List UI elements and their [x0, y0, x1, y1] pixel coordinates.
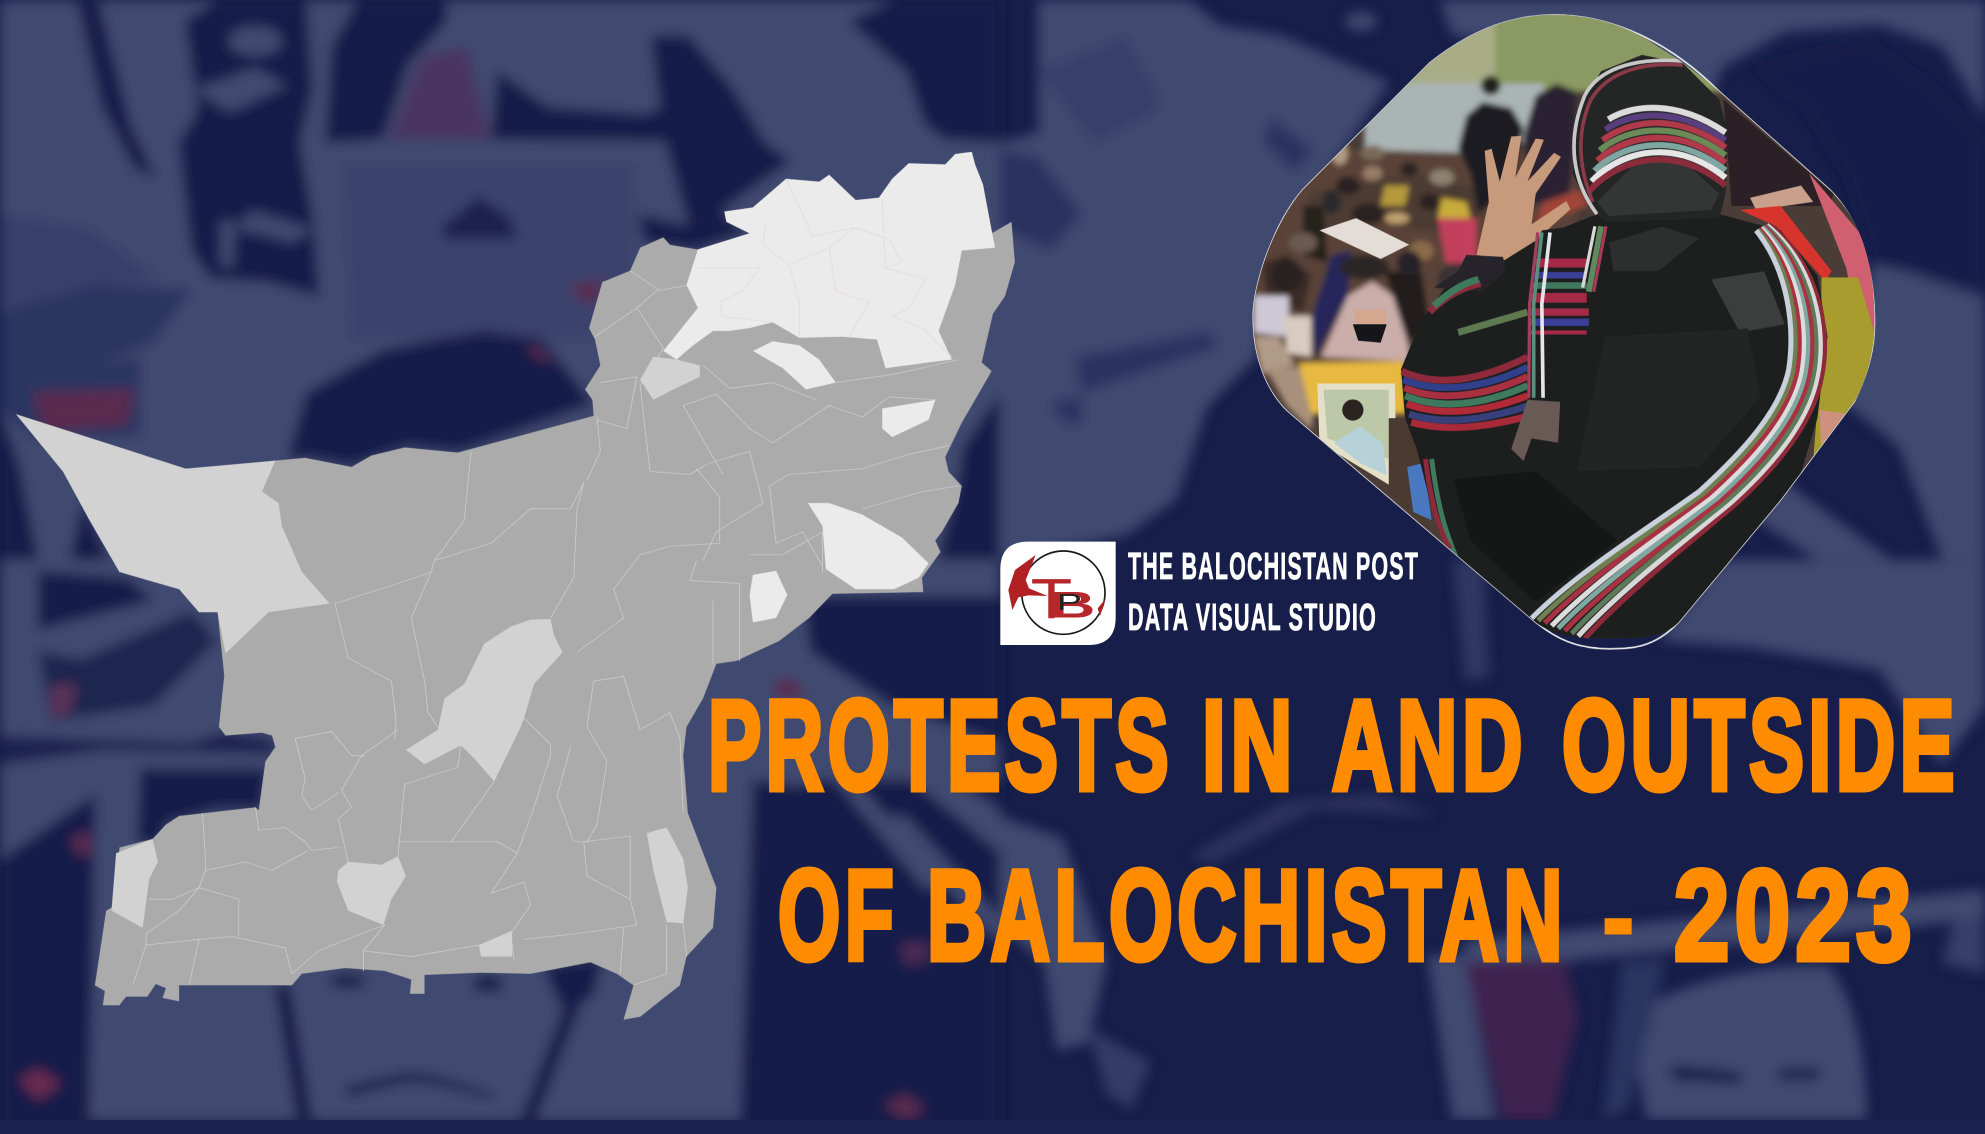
right background figures	[1723, 100, 1834, 206]
lower left strip	[1426, 459, 1456, 557]
main title: PROTESTS	[708, 674, 1173, 818]
map base	[16, 152, 1015, 1020]
main title: -	[1601, 844, 1641, 988]
studio name text: THE BALOCHISTAN POST	[1128, 546, 1419, 588]
main title: IN	[1202, 674, 1297, 818]
district boundaries	[133, 271, 958, 985]
studio name text: DATA VISUAL STUDIO	[1128, 597, 1377, 639]
main title	[708, 674, 1959, 988]
sash fringe	[1511, 400, 1560, 461]
logo tile	[1000, 542, 1116, 645]
logo monogram letters: T	[1031, 568, 1072, 631]
logo circle	[1022, 551, 1105, 634]
logo monogram letters: B	[1050, 584, 1095, 625]
headscarf	[1572, 55, 1728, 222]
photo outline	[1253, 15, 1874, 649]
northern boundaries	[698, 179, 952, 357]
sleeve bands	[1402, 279, 1528, 427]
footer strip	[0, 1120, 1985, 1134]
hanging sash	[1528, 227, 1564, 398]
main title: AND	[1332, 674, 1527, 818]
logo right accent	[1098, 598, 1106, 616]
logo monogram letters	[1031, 568, 1095, 631]
studio name text	[1128, 546, 1419, 639]
crowd details	[1355, 310, 1387, 332]
map of Balochistan districts	[16, 152, 1015, 1020]
figure black dress	[1401, 214, 1828, 647]
logo: The Balochistan Post	[1000, 542, 1116, 645]
hand	[1477, 136, 1570, 260]
logo monogram letters: P	[1057, 589, 1082, 615]
main title: 2023	[1674, 844, 1917, 988]
photo: protester in patterned shawl facing crowd	[1250, 10, 1890, 650]
top northern districts, near-white	[663, 152, 995, 622]
light districts	[16, 357, 700, 957]
main title: OF	[778, 844, 898, 988]
shawl long band	[1532, 224, 1825, 639]
main title: BALOCHISTAN	[927, 844, 1567, 988]
logo red wing	[1008, 555, 1048, 610]
